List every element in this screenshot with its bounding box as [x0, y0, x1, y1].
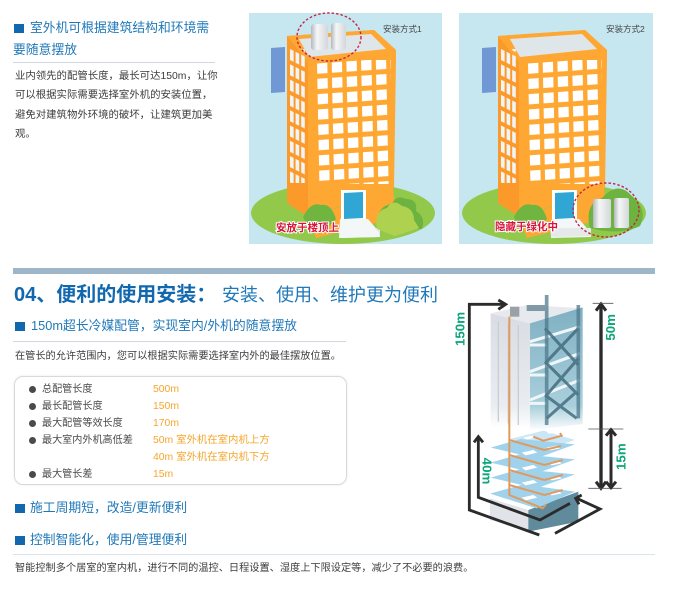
body text: piping range: 在管长的允许范围内，您可以根据实际需要选择室内外的最佳摆放位置。	[15, 351, 341, 362]
subheading: intelligent control: 控制智能化，使用/管理便利	[30, 532, 187, 547]
dashed highlight circle	[573, 183, 639, 237]
spec: max piping length: 最长配管长度	[42, 400, 103, 412]
section: top text block	[13, 20, 218, 140]
spec: max piping length: 150m	[153, 400, 179, 412]
floor plates	[490, 431, 575, 508]
label: 40m: 40m	[479, 458, 494, 484]
body text	[15, 70, 218, 140]
building illustration 2	[462, 30, 646, 244]
building illustration 1	[251, 30, 435, 244]
spec: max equivalent length: 最大配管等效长度	[42, 418, 123, 428]
label: 15m: 15m	[614, 443, 629, 470]
spec: max equivalent length	[29, 417, 179, 428]
arrow: 150m pipe run	[469, 300, 600, 535]
subheading: outdoor unit placement	[13, 20, 209, 57]
spec: max piping length	[29, 400, 179, 412]
spec: total piping length: 总配管长度	[42, 384, 92, 394]
arrow: 40m pipe run	[474, 437, 570, 520]
heading: section 04: 04、便利的使用安装：	[14, 284, 216, 306]
section: top text block: 要随意摆放	[13, 42, 77, 57]
subheading: outdoor unit placement: 室外机可根据建筑结构和环境需	[30, 20, 209, 35]
spec: total piping length	[29, 383, 179, 394]
spec: max height difference: 40m 室外机在室内机下方	[153, 452, 270, 462]
body text: 业内领先的配管长度，最长可达150m，让你	[15, 71, 218, 82]
indoor units	[522, 430, 562, 500]
arrow: 15m height	[606, 430, 616, 488]
body text: intelligent control: 智能控制多个居室的室内机，进行不同的温控、日程设置、湿度上下限设定等，减少了不必要的浪费。	[15, 563, 473, 574]
refrigerant pipes	[509, 317, 563, 508]
body text: 避免对建筑物外环境的破坏，让建筑更加美	[15, 110, 212, 121]
dashed highlight circle	[297, 13, 361, 61]
label: 50m: 50m	[603, 314, 618, 341]
spec: max height difference	[29, 434, 270, 462]
spec: max pipe length difference	[29, 468, 173, 480]
subheading: short construction period: 施工周期短，改造/更新便利	[30, 500, 187, 515]
caption: on rooftop: 安放于楼顶上	[276, 221, 339, 234]
spec: max pipe length difference: 15m	[153, 468, 173, 480]
diagram: tower with refrigerant piping	[453, 295, 629, 535]
body text: 可以根据实际需要选择室外机的安装位置，	[15, 90, 212, 101]
panel: installation method 1	[249, 13, 442, 244]
spec: max pipe length difference: 最大管长差	[42, 468, 92, 480]
spec: max height difference: 50m 室外机在室内机上方	[153, 434, 270, 446]
icon: ground outdoor units	[593, 198, 629, 228]
caption: hidden in greenery: 隐藏于绿化中	[495, 220, 558, 233]
section divider bar	[13, 268, 655, 274]
body text: 观。	[15, 129, 36, 140]
illustrations and charts	[249, 12, 653, 536]
spec: total piping length: 500m	[153, 384, 179, 394]
label: method 2: 安装方式2	[606, 24, 645, 34]
panel: piping specifications	[14, 376, 347, 485]
heading: section 04	[14, 284, 438, 306]
heading: section 04: 安装、使用、维护更为便利	[222, 285, 438, 305]
label: method 1: 安装方式1	[383, 24, 422, 34]
subheading: 150m piping: 150m超长冷媒配管，实现室内/外机的随意摆放	[31, 318, 297, 333]
arrow: 50m height	[588, 303, 623, 488]
icon: rooftop outdoor units	[311, 23, 346, 50]
panel: installation method 2	[459, 13, 653, 244]
tower base	[490, 492, 578, 532]
tower upper	[491, 295, 584, 431]
spec: max equivalent length: 170m	[153, 418, 179, 428]
label: 150m: 150m	[453, 312, 468, 346]
spec: max height difference: 最大室内外机高低差	[42, 434, 133, 446]
